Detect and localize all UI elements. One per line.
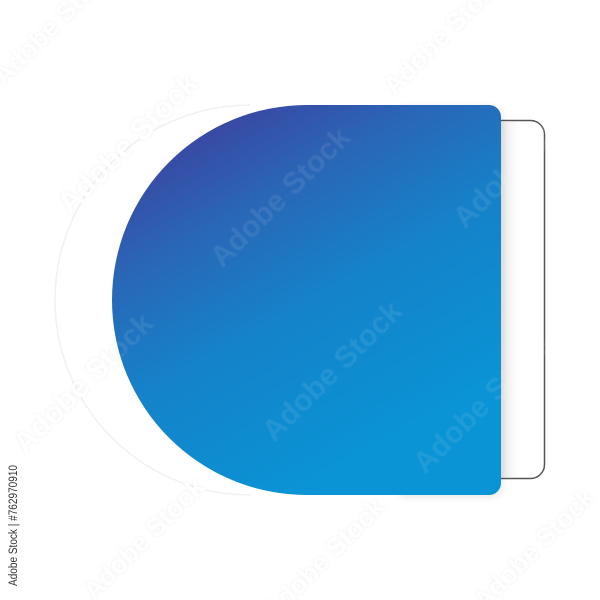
watermarks on blue shape: Adobe Stock	[256, 295, 409, 448]
back card outline	[488, 120, 544, 478]
watermarks on blue shape	[7, 82, 600, 480]
watermarks on blue shape: Adobe Stock	[7, 307, 160, 460]
watermarks on blue shape: Adobe Stock	[204, 121, 357, 274]
watermarks on white background: Adobe Stock	[7, 307, 160, 460]
faint outer arc	[55, 105, 250, 495]
watermarks on blue shape: Adobe Stock	[447, 82, 600, 235]
stock id label: Adobe Stock | #762970910	[8, 465, 20, 586]
watermarks on blue shape: Adobe Stock	[407, 327, 560, 480]
watermarks on white background: Adobe Stock	[52, 67, 205, 220]
main shape shadow	[400, 107, 502, 497]
main gradient shape	[112, 105, 501, 495]
